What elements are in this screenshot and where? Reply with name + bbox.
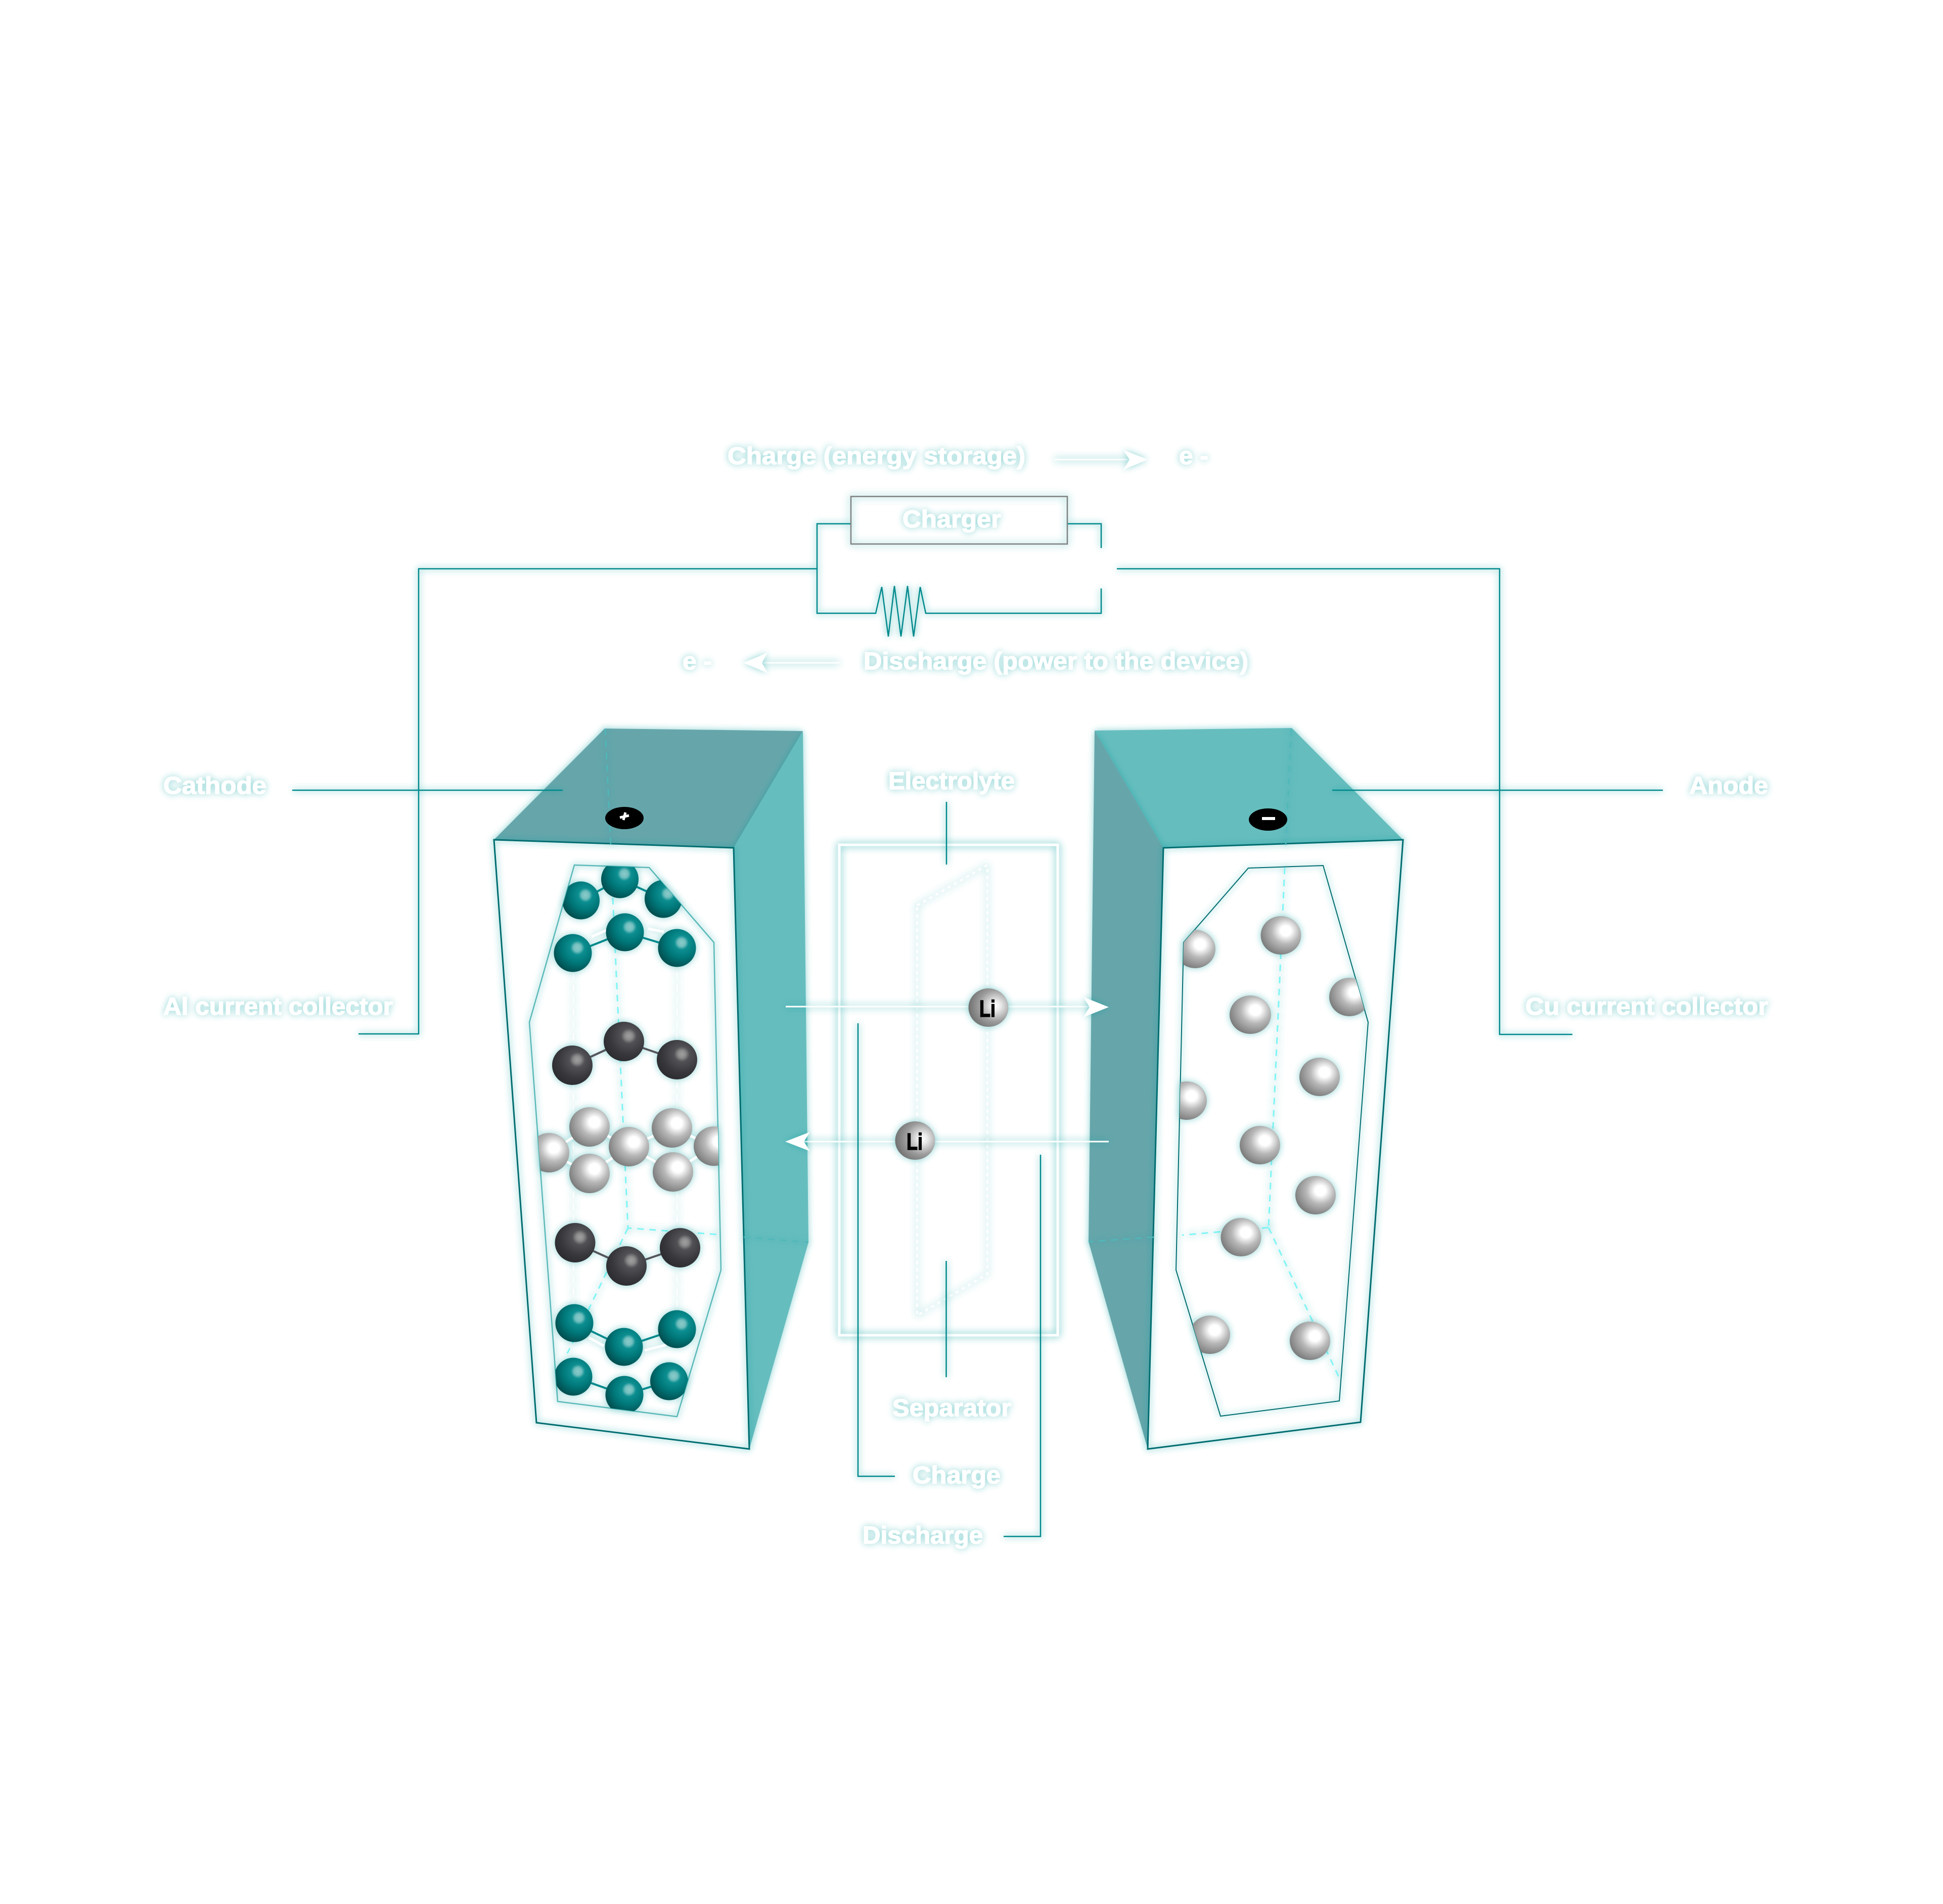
electron label: charge: e - [1179,443,1208,470]
separator label: Separator [892,1395,1011,1422]
charger box [851,496,1067,544]
discharge label: Discharge [863,1522,983,1549]
panel: cathode block [494,729,808,1449]
electrolyte label: Electrolyte [888,768,1015,795]
cathode front face [494,840,749,1449]
charger label: Charger [902,506,1001,533]
labels [163,443,1768,1549]
anode hidden edges [1089,730,1340,1380]
al collector label: Al current collector [163,993,393,1020]
anode front outline [1148,840,1403,1449]
atoms: lower dark layer [555,1223,700,1286]
atoms: lithium layer [529,1107,734,1193]
lithium ion: charge [969,988,1008,1027]
cathode hidden edges [567,729,808,1353]
cathode top face [494,729,803,848]
arrow: lithium to cathode [785,1132,1109,1151]
anode lithium atoms [1166,916,1370,1360]
cathode positive terminal [605,807,644,829]
arrow: discharge electron flow [743,653,839,673]
arrow: charge electron flow [1054,450,1148,470]
charge label: Charge [913,1462,1001,1489]
panel: electrolyte and separator [839,845,1058,1335]
cathode front outline [494,840,749,1449]
leader lines [292,790,1663,1536]
electron label: discharge: e - [683,648,712,675]
cu collector label: Cu current collector [1525,993,1768,1020]
circuit wiring [292,524,1663,1536]
anode side face [1089,731,1163,1449]
title: charge: Charge (energy storage) [728,443,1025,470]
atoms: bottom teal layers [554,1304,696,1414]
atoms: top teal layers [554,860,696,972]
title: discharge: Discharge (power to the device) [864,648,1248,675]
cathode inner outline [529,865,721,1417]
lithium ion: discharge [895,1121,935,1160]
cathode side face [734,731,808,1449]
anode front face [1148,840,1403,1449]
anode label: Anode [1689,773,1768,799]
anode top face [1095,728,1403,848]
panel: anode block [1089,728,1403,1449]
cathode label: Cathode [163,773,266,799]
atoms: upper dark layer [552,1022,697,1085]
anode negative terminal [1249,808,1287,831]
electrolyte box [839,845,1058,1335]
lithium ion: charge: Li [979,995,996,1022]
lithium ion: discharge: Li [907,1128,923,1155]
arrow: lithium to anode [786,997,1109,1017]
separator sheet [917,865,987,1316]
anode inner outline [1176,866,1368,1416]
